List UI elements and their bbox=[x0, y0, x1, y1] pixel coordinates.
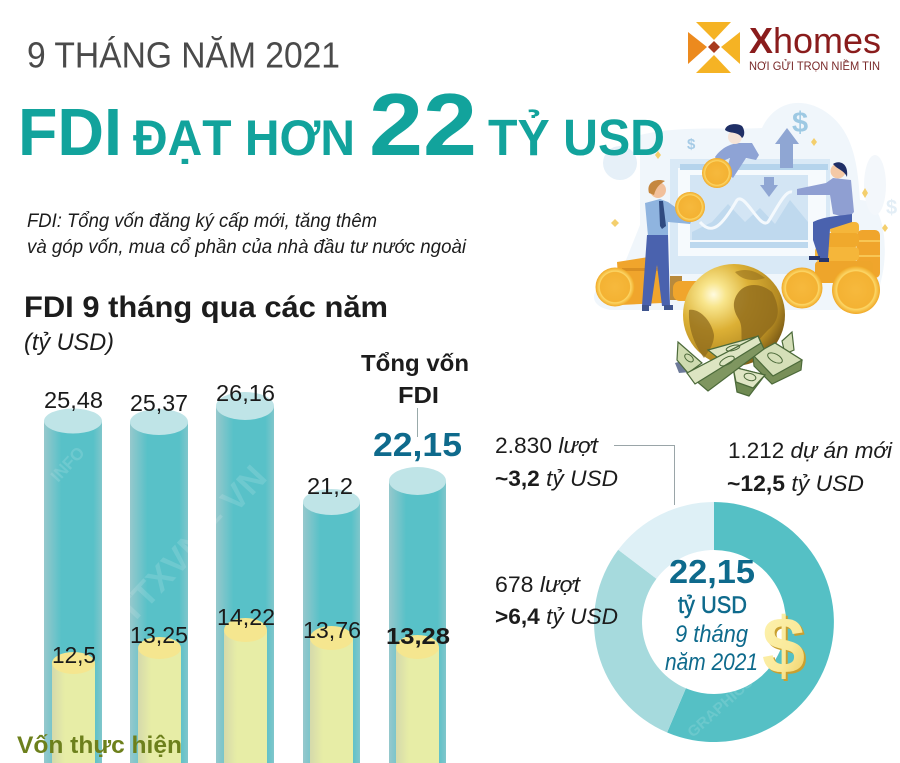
donut center text: 9 tháng bbox=[675, 621, 749, 648]
bar: column 1: 25,48 bbox=[44, 387, 103, 413]
icons: coin stacks right bbox=[782, 222, 880, 314]
callout: capital increases bbox=[495, 572, 618, 629]
bar: column 4: 21,2 bbox=[307, 473, 353, 499]
bar: column 1 bbox=[44, 387, 103, 763]
donut center text: năm 2021 bbox=[665, 649, 758, 676]
title: ĐẠT HƠN bbox=[133, 110, 355, 166]
icon: coin top bbox=[702, 158, 732, 188]
bar: column 4: 13,76 bbox=[303, 617, 361, 643]
bar: column 5, 2021: 13,28 bbox=[386, 623, 450, 649]
label: total FDI capital: FDI bbox=[398, 382, 439, 408]
bar: column 2: 25,37 bbox=[130, 390, 188, 416]
callout: new projects: ~12,5 tỷ USD bbox=[727, 471, 864, 496]
logo: Xhomes bbox=[688, 20, 881, 73]
person: top bbox=[715, 124, 759, 178]
segment: capital increases bbox=[618, 502, 714, 579]
bar: column 3 bbox=[216, 380, 275, 763]
callout: capital contribution purchases: 2.830 lượt bbox=[495, 433, 599, 458]
heading: period: 9 THÁNG NĂM 2021 bbox=[27, 34, 340, 76]
icons: coin stacks left bbox=[596, 256, 707, 306]
icon: dollar signs bbox=[687, 107, 897, 219]
bar chart: FDI cylinders bbox=[44, 380, 450, 763]
bar: column 5, 2021 bbox=[386, 467, 450, 763]
segment: capital contributions bbox=[594, 550, 686, 732]
icon: dollar signs: $ bbox=[687, 136, 696, 153]
icon: golden globe bbox=[683, 264, 785, 366]
watermark: agency marks on bars bbox=[47, 443, 274, 630]
title: TỶ USD bbox=[488, 108, 665, 166]
heading: bar chart title: FDI 9 tháng qua các năm bbox=[24, 291, 388, 324]
illustration: finance team, coins and golden globe bbox=[594, 103, 897, 396]
bar: column 2: 13,25 bbox=[130, 622, 188, 648]
watermark: on donut: GRAPHICS bbox=[684, 673, 757, 741]
logo mark bbox=[688, 22, 740, 73]
label: disbursed capital: Vốn thực hiện bbox=[17, 732, 182, 759]
callout: capital contribution purchases: ~3,2 tỷ USD bbox=[495, 466, 618, 491]
illustration background blobs bbox=[594, 103, 886, 310]
icon: monitor with chart bbox=[670, 159, 830, 274]
icon: pile of dollar bills bbox=[675, 332, 802, 396]
donut chart: FDI breakdown bbox=[594, 502, 834, 742]
icon: down arrow bbox=[760, 177, 778, 197]
person: left with tie bbox=[642, 180, 692, 311]
title bbox=[18, 75, 665, 174]
watermark: agency marks on bars: TTXVN – VN bbox=[110, 458, 274, 630]
chart unit: (tỷ USD) bbox=[24, 329, 114, 356]
bar: column 3: 26,16 bbox=[216, 380, 275, 406]
title: 22 bbox=[369, 75, 477, 174]
watermark: agency marks on bars: INFO bbox=[47, 443, 89, 486]
icon: gold dollar sign: $ bbox=[764, 603, 807, 692]
bar: column 1: 12,5 bbox=[52, 642, 96, 668]
person: right seated on coins bbox=[797, 162, 854, 262]
icon: dollar signs: $ bbox=[886, 197, 897, 219]
donut center text: tỷ USD bbox=[678, 592, 747, 619]
text block: FDI definition bbox=[27, 211, 467, 258]
donut center text: 22,15 bbox=[669, 553, 755, 590]
callout: capital increases: 678 lượt bbox=[495, 572, 581, 597]
callout: new projects bbox=[727, 438, 893, 496]
text block: FDI definition: FDI: Tổng vốn đăng ký cấp mới, tăng thêm bbox=[27, 211, 377, 232]
icon: dollar signs: $ bbox=[792, 107, 808, 139]
title: FDI bbox=[18, 95, 122, 170]
logo wordmark: Xhomes bbox=[749, 20, 881, 61]
label: total FDI capital: 22,15 bbox=[373, 426, 462, 463]
callout: capital increases: >6,4 tỷ USD bbox=[495, 604, 618, 629]
logo tagline: NƠI GỬI TRỌN NIỀM TIN bbox=[749, 58, 880, 73]
label: total FDI capital bbox=[361, 350, 469, 463]
icon: coin held by left person bbox=[675, 192, 705, 222]
icons: small yellow stars bbox=[611, 138, 888, 232]
icon: gold dollar sign: $ bbox=[762, 601, 805, 690]
bar: column 4 bbox=[303, 473, 361, 763]
label: total FDI capital: Tổng vốn bbox=[361, 350, 469, 376]
text block: FDI definition: và góp vốn, mua cổ phần của nhà đầu tư nước ngoài bbox=[27, 237, 467, 258]
callout: capital contribution purchases bbox=[495, 433, 674, 505]
icon: up arrow bbox=[775, 128, 799, 168]
bar: column 2 bbox=[130, 390, 188, 763]
segment: new projects bbox=[667, 502, 834, 742]
bar: column 3: 14,22 bbox=[217, 604, 275, 630]
callout: new projects: 1.212 dự án mới bbox=[728, 438, 893, 463]
donut center text bbox=[665, 553, 758, 676]
